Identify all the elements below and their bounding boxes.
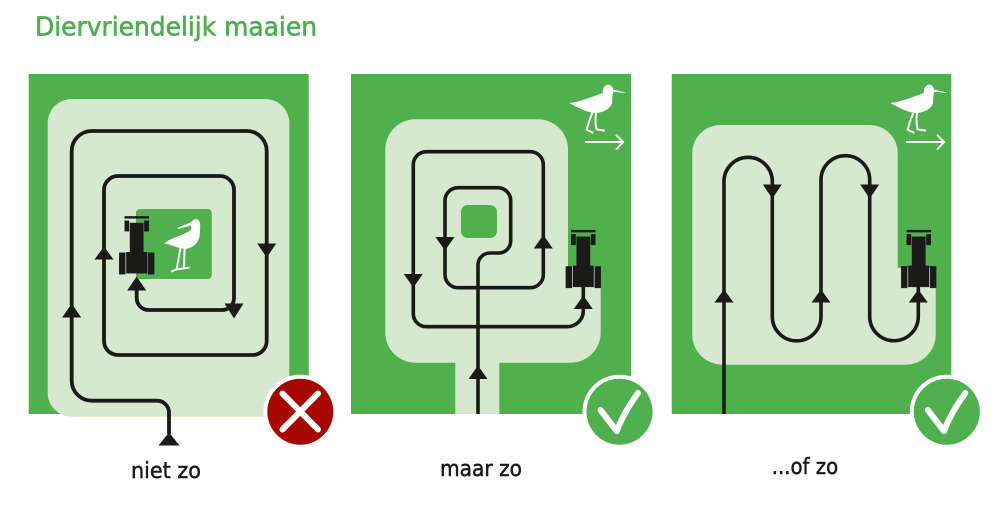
- panel: of zo: [672, 74, 984, 449]
- direction arrows: [62, 244, 276, 446]
- mown area: [385, 119, 601, 414]
- badge: correct: [910, 375, 984, 449]
- icon: tractor: [119, 216, 154, 274]
- mown area: [48, 99, 289, 417]
- icon: tractor: [566, 230, 601, 288]
- field background: [29, 74, 309, 414]
- title: Diervriendelijk maaien: [35, 12, 317, 42]
- label: of zo: ...of zo: [772, 455, 838, 480]
- label: maar zo: maar zo: [440, 457, 522, 482]
- badge: wrong: [263, 375, 337, 449]
- remaining patch: [136, 209, 212, 279]
- icon: bird: [164, 219, 200, 272]
- mown area: [692, 125, 936, 365]
- panel: niet zo: [29, 74, 337, 449]
- badge: correct: [582, 375, 656, 449]
- panel: maar zo: [351, 74, 656, 449]
- direction arrows: [404, 235, 593, 379]
- field background: [672, 74, 951, 414]
- icon: bird with arrow: [890, 85, 946, 150]
- icon: tractor: [901, 230, 936, 288]
- mowing route: [413, 152, 583, 414]
- field background: [351, 74, 631, 414]
- mowing route: [72, 131, 267, 434]
- label: niet zo: niet zo: [131, 459, 201, 484]
- mowing route: [724, 156, 918, 414]
- direction arrows: [714, 184, 928, 302]
- remaining patch: [461, 205, 497, 238]
- icon: bird with arrow: [569, 85, 625, 150]
